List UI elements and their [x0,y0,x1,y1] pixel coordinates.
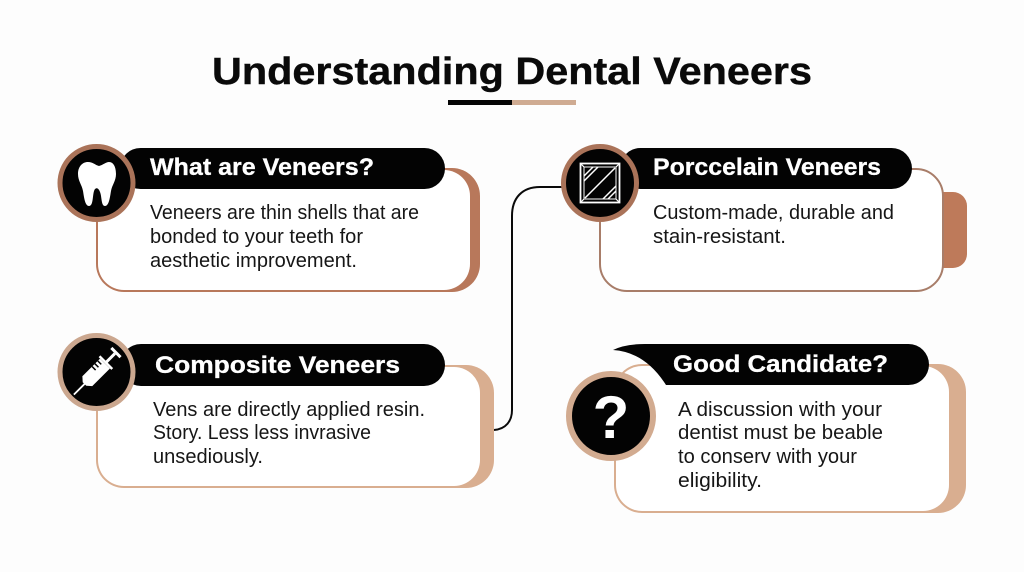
icon: porcelain shell [564,146,636,220]
body text: Vens are directly applied resin. [153,399,425,421]
body text: bonded to your teeth for [150,226,363,248]
heading: Composite Veneers [155,352,400,379]
body text [153,399,425,468]
body text: aesthetic improvement. [150,250,357,272]
connector arrow between cards [494,187,562,430]
heading bar [620,148,912,189]
body text [150,202,419,272]
body text: eligibility. [678,470,762,492]
heading: What are Veneers? [150,154,374,181]
body text: unsediously. [153,446,263,468]
heading bar [120,148,445,189]
heading: Good Candidate? [673,351,888,378]
body text: to conserv with your [678,446,857,468]
body text [678,399,883,492]
icon: question mark [569,374,653,458]
body text: Custom-made, durable and [653,202,894,224]
body text [653,202,894,248]
panel: what are veneers [60,146,480,292]
icon: question mark: ? [593,384,629,451]
panel: composite veneers [60,336,494,488]
card body [614,364,966,513]
title underline [448,100,576,105]
body text: Story. Less less invrasive [153,422,371,444]
heading bar [120,344,445,386]
card body [96,168,480,292]
body text: dentist must be beable [678,422,883,444]
heading: Porccelain Veneers [653,154,881,181]
panel: good candidate [569,344,966,513]
body text: stain-resistant. [653,226,786,248]
icon: syringe [60,336,133,408]
panel: porcelain veneers [564,146,967,291]
body text: Veneers are thin shells that are [150,202,419,224]
card body [600,169,943,291]
body text: A discussion with your [678,399,882,421]
title: Understanding Dental Veneers [212,51,812,93]
icon: tooth [60,146,133,220]
side tab [925,192,967,268]
heading bar [613,344,929,385]
card body [96,365,494,488]
